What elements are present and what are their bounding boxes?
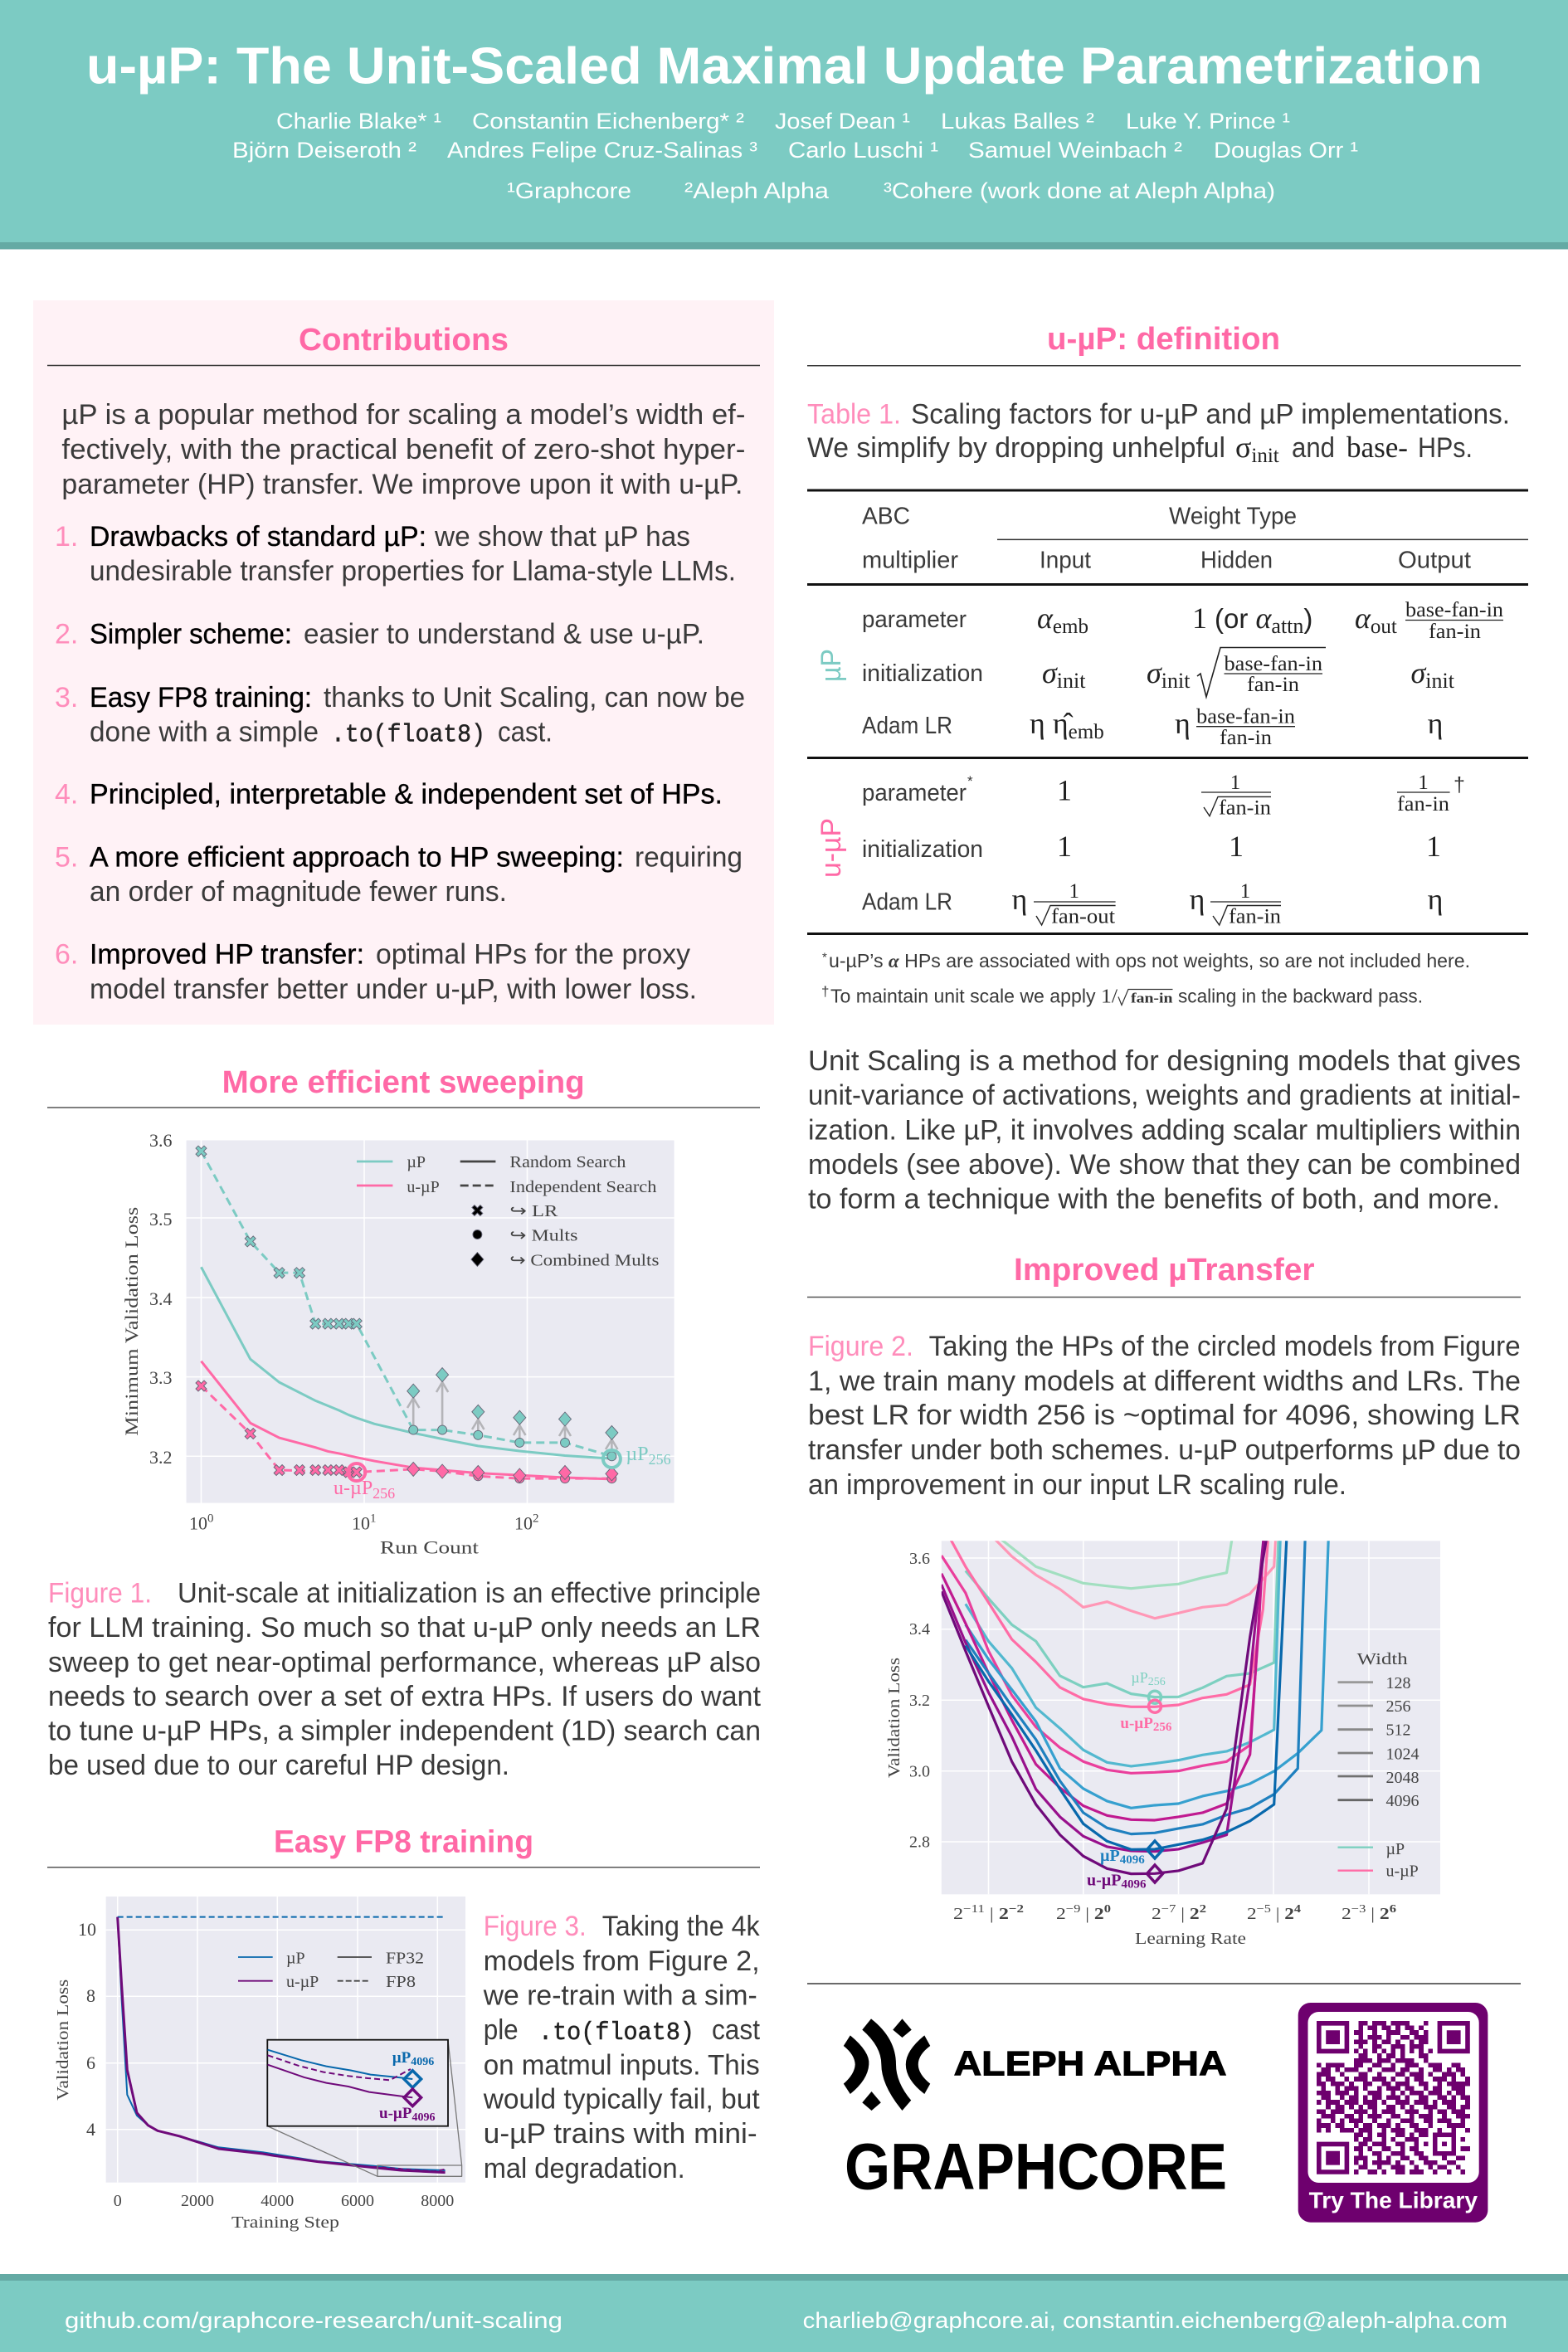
validation curves by width [942,1537,1328,1874]
row label: µP: µP [816,649,847,682]
axis title: x: Training Step [231,2213,339,2232]
figure 2 caption: Taking the HPs of the circled models from Figure [929,1331,1521,1362]
µP rows: base-fan-in [1405,599,1504,621]
µP rows: initialization [862,660,983,687]
table caption: and [1292,432,1335,464]
x axis ticks: 6 [1390,1903,1396,1916]
label: µP4096: 4096 [1120,1853,1145,1867]
y axis ticks: 3.3 [149,1367,173,1388]
figure 3 caption: we re-train with a sim- [483,1980,757,2012]
chart: figure 2 learning rate vs validation loss [885,1537,1440,1948]
qr caption: Try The Library [1309,2188,1478,2213]
intro paragraph: fectively, with the practical benefit of zero-shot hyper- [61,434,745,465]
legend: µP [407,1153,426,1171]
figure 1 caption: needs to search over a set of extra HPs. If users do want [48,1681,762,1712]
authors: Björn Deiseroth ² [232,138,416,163]
unit scaling paragraph: ization. Like µP, it involves adding scalar multipliers within [808,1115,1521,1147]
µP rows: ) [1303,603,1312,634]
list item 6 [55,939,697,1006]
u-µP rows: † [1454,773,1465,796]
µP rows: η [1428,707,1443,740]
x axis ticks [953,1903,1396,1923]
µP rows: Adam LR [862,713,952,739]
x axis ticks: 2 [1190,1905,1200,1923]
authors: Samuel Weinbach ² [968,138,1182,163]
unit scaling paragraph: Unit Scaling is a method for designing models that gives [808,1045,1521,1077]
x axis ticks: 2 [1342,1905,1350,1923]
y axis ticks: 3.0 [909,1763,930,1781]
list item 3: done with a simple [90,717,319,748]
list item 3: cast. [498,717,553,748]
affiliations: ¹Graphcore [507,178,631,203]
table caption: We simplify by dropping unhelpful [807,432,1225,464]
u-µP rows: 1 [1057,774,1072,807]
x axis ticks: −2 [1009,1903,1024,1916]
heading: easy fp8 training: Easy FP8 training [274,1825,533,1860]
u-µP rows: 1 [1240,880,1250,903]
table footnotes: scaling in the backward pass. [1178,986,1423,1007]
table caption: HPs. [1418,432,1473,464]
µP rows [862,599,1504,749]
y axis ticks: 2.8 [909,1833,930,1852]
legend: ↪ Mults [509,1227,578,1245]
label: u-µP256: 256 [373,1485,395,1502]
authors: Carlo Luschi ¹ [788,138,938,163]
inset zoom panel [267,2040,448,2126]
x axis ticks: 1 [370,1512,377,1526]
legend: 128 [1385,1674,1410,1692]
table footnotes: * [822,951,827,964]
x axis ticks: −9 [1066,1903,1080,1916]
u-µP rows: 1 [1229,830,1244,863]
x axis ticks: 2 [953,1905,962,1923]
u-µP rows: fan-in [1219,796,1272,820]
legend: 512 [1385,1721,1410,1740]
y axis ticks: 3.5 [149,1209,173,1230]
x axis ticks: 2 [1380,1905,1390,1923]
column headers: Output [1398,548,1471,574]
figure 3 caption: mal degradation. [484,2153,685,2184]
legend: 1024 [1385,1746,1419,1764]
table footnotes: † [821,984,829,999]
list item 5: A more efficient approach to HP sweeping: [90,841,624,873]
legend: Independent Search [509,1178,656,1196]
µP rows: init [1161,669,1191,693]
figure 1 caption: for LLM training. So much so that u-µP only needs an LR [48,1612,761,1643]
list item 2: 2. [55,619,78,650]
figure 3 caption: models from Figure 2, [484,1945,760,1977]
x axis ticks: 2 [1056,1905,1064,1923]
label: µP256: µP [1131,1669,1148,1686]
µP rows: parameter [862,606,967,633]
label: µP256: µP [626,1444,649,1465]
legend [357,1153,660,1269]
axis title: y: Minimum Validation Loss [121,1207,142,1436]
x axis ticks: 10 [352,1513,370,1534]
list item 5: 5. [55,841,78,873]
µP rows: base-fan-in [1196,705,1296,728]
u-µP rows: * [967,773,973,789]
figure 3 caption: on matmul inputs. This [484,2050,760,2082]
unit scaling paragraph: unit-variance of activations, weights and gradients at initial- [808,1080,1521,1112]
x axis ticks: | [985,1905,999,1923]
figure 3 caption: ple [484,2014,519,2046]
footer: repository link: github.com/graphcore-research/unit-scaling [65,2308,562,2333]
label: u-µP256: u-µP [1120,1715,1153,1732]
x axis ticks [189,1512,539,1534]
u-µP rows: Adam LR [862,889,952,916]
u-µP rows: 1 [1418,772,1429,794]
axis title: x: Learning Rate [1135,1930,1246,1948]
x axis ticks: 0 [114,2192,122,2210]
label: u-µP256: u-µP [334,1478,373,1499]
x axis ticks: 2 [1152,1905,1160,1923]
legend [1337,1650,1419,1881]
authors: Luke Y. Prince ¹ [1126,109,1290,134]
label: µP256: 256 [1148,1676,1166,1688]
panel: contributions [33,300,774,1025]
list item 3 [55,682,745,750]
list item 4: Principled, interpretable & independent set of HPs. [90,778,723,810]
label: µP256: 256 [649,1451,671,1468]
y axis ticks: 4 [86,2119,95,2140]
u-µP rows: parameter [862,780,967,806]
column headers: ABC [862,503,910,529]
x axis ticks: −7 [1161,1903,1176,1916]
unit scaling paragraph [808,1045,1521,1215]
µP rows: 1 (or α [1192,601,1271,635]
x axis ticks: 2 [999,1905,1009,1923]
list item 5: requiring [635,841,743,873]
pink markers [196,1381,618,1483]
y axis ticks: 3.4 [909,1620,930,1639]
column headers: multiplier [862,548,958,574]
legend: u-µP [407,1178,440,1196]
figure 2 caption: 1, we train many models at different widths and LRs. The [808,1366,1521,1397]
qr code card [1298,2003,1488,2223]
table caption: Table 1. [807,398,901,430]
x axis ticks: 2000 [181,2192,214,2210]
u-µP rows: 1 [1230,772,1240,794]
x axis ticks [114,2192,454,2210]
authors: Douglas Orr ¹ [1214,138,1358,163]
x axis ticks: | [1366,1905,1380,1923]
heading: contributions: Contributions [299,323,509,358]
µP rows: out [1371,616,1397,638]
figure 2 caption: Figure 2. [808,1331,913,1362]
heading: u-µP definition: u-µP: definition [1047,322,1280,357]
u-µP rows: initialization [862,836,983,863]
zoom connectors [267,2040,462,2176]
x axis ticks: 6000 [341,2192,374,2210]
y axis ticks: 10 [78,1919,96,1940]
µP rows: η η̂ [1030,707,1069,740]
table caption: base- [1346,431,1408,464]
list item 2 [55,619,704,650]
list item 5 [55,841,743,908]
y axis ticks: 3.2 [909,1692,930,1710]
authors [232,109,1358,163]
x axis ticks: | [1176,1905,1190,1923]
authors: Lukas Balles ² [941,109,1094,134]
heading: more efficient sweeping: More efficient sweeping [222,1065,585,1100]
legend: ↪ Combined Mults [509,1251,660,1269]
list item 5: an order of magnitude fewer runs. [90,876,507,908]
figure 3 caption: cast [712,2014,761,2046]
µP rows: init [1057,669,1086,693]
figure 3 caption: Taking the 4k [602,1911,761,1942]
x axis ticks: 2 [1247,1905,1255,1923]
table footnotes: u-µP’s α HPs are associated with ops not weights, so are not included here. [829,950,1470,971]
label: u-µP4096: 4096 [1122,1878,1147,1892]
affiliations: ³Cohere (work done at Aleph Alpha) [884,178,1275,203]
chart: figure 1 run count vs minimum validation loss [121,1130,674,1558]
figure 3 caption: Figure 3. [484,1911,587,1942]
circled models [603,1450,621,1468]
list item 6: model transfer better under u-µP, with lower loss. [90,974,697,1006]
x axis ticks: 2 [1094,1905,1104,1923]
list item 6: optimal HPs for the proxy [376,939,690,971]
x axis ticks: 0 [1104,1903,1111,1916]
label: u-µP4096: 4096 [411,2111,435,2124]
list item 6: Improved HP transfer: [90,939,364,971]
column headers [862,503,1471,574]
µP rows: α [1037,601,1054,635]
µP rows: base-fan-in [1225,653,1323,675]
µP rows: fan-in [1220,727,1273,749]
u-µP rows: fan-out [1051,906,1115,928]
y axis ticks [149,1130,173,1468]
x axis ticks: 2 [533,1512,539,1526]
figure 1 caption: to tune u-µP HPs, a simpler independent (1D) search can [48,1716,761,1747]
y axis ticks: 3.4 [149,1288,173,1309]
legend: u-µP [286,1973,319,1991]
list item 3: Easy FP8 training: [90,682,312,713]
unit scaling paragraph: to form a technique with the benefits of both, and more. [808,1183,1500,1215]
table footnotes: fan-in [1131,991,1173,1006]
x axis ticks: 0 [207,1512,214,1526]
list item 3: 3. [55,682,78,713]
y axis ticks: 6 [86,2053,95,2073]
x axis ticks: | [1080,1905,1094,1923]
table footnotes: To maintain unit scale we apply [830,986,1096,1007]
µP rows: init [1425,669,1455,693]
label: u-µP4096: u-µP [379,2105,411,2122]
table caption: init [1251,445,1279,467]
list item 1: we show that µP has [434,521,690,553]
authors: Josef Dean ¹ [775,109,910,134]
intro paragraph: parameter (HP) transfer. We improve upon it with u-µP. [61,469,743,500]
x axis ticks: 8000 [421,2192,454,2210]
figure 2 caption: transfer under both schemes. u-µP outperforms µP due to [808,1434,1521,1466]
affiliations: ²Aleph Alpha [684,178,830,203]
footer: contact emails: charlieb@graphcore.ai, constantin.eichenberg@aleph-alpha.com [803,2308,1507,2333]
x axis ticks: 10 [514,1513,533,1534]
µP rows: emb [1053,616,1088,638]
list item 3: thanks to Unit Scaling, can now be [324,682,745,713]
qr code pattern [1317,2021,1470,2174]
µP rows: emb [1069,721,1104,743]
unit scaling paragraph: models (see above). We show that they can be combined [808,1149,1521,1181]
table caption [807,398,1510,467]
x axis ticks: 2 [1200,1903,1206,1916]
legend: µP [286,1950,305,1968]
heading: improved µTransfer: Improved µTransfer [1014,1253,1315,1288]
logo: aleph alpha: ALEPH ALPHA [954,2044,1227,2083]
list item 2: easier to understand & use u-µP. [304,619,704,650]
column headers: Input [1040,548,1091,574]
logo: graphcore: GRAPHCORE [845,2129,1227,2203]
y axis ticks: 8 [86,1985,95,2006]
x axis ticks: 10 [189,1513,207,1534]
figure 3 caption [483,1911,761,2184]
u-µP rows: fan-in [1229,906,1282,928]
figure 1 caption: be used due to our careful HP design. [48,1750,509,1781]
list item 2: Simpler scheme: [90,619,292,650]
legend: u-µP [1385,1863,1419,1881]
legend: FP8 [386,1973,416,1991]
list item 1: Drawbacks of standard µP: [90,521,426,553]
arrows from multipliers to combined multipliers [407,1381,617,1456]
label: u-µP4096: u-µP [1087,1872,1122,1890]
table footnotes [821,950,1470,1007]
authors: Charlie Blake* ¹ [276,109,441,134]
figure 2 caption: an improvement in our input LR scaling rule. [808,1469,1346,1501]
list item 1 [55,521,736,587]
legend: FP32 [386,1950,424,1968]
x axis ticks: 4000 [261,2192,294,2210]
legend [238,1950,424,1991]
axis title: y: Validation Loss [54,1979,72,2101]
x axis ticks: −5 [1257,1903,1271,1916]
legend: ↪ LR [509,1202,558,1220]
list item 1: 1. [55,521,78,553]
label: µP4096: µP [392,2049,411,2067]
icon: aleph alpha mark [844,2018,930,2111]
affiliations [507,178,1275,203]
axis title: x: Run Count [380,1537,479,1558]
label: µP4096: 4096 [411,2056,434,2068]
figure 1 caption: Unit-scale at initialization is an effective principle [178,1578,761,1609]
figure 1 caption: Figure 1. [48,1578,152,1609]
teal markers [196,1146,618,1461]
u-µP rows: η [1428,883,1443,916]
title: u-µP: The Unit-Scaled Maximal Update Parametrization [86,38,1483,95]
x axis ticks: | [1271,1905,1284,1923]
figure 3 caption: u-µP trains with mini- [484,2118,757,2150]
legend: Random Search [509,1153,626,1171]
u-µP rows: 1 [1426,830,1441,863]
y axis ticks: 3.6 [149,1130,173,1151]
u-µP rows: 1 [1069,880,1079,903]
legend: 4096 [1385,1792,1419,1810]
x axis ticks: −3 [1351,1903,1366,1916]
x axis ticks: −11 [963,1903,985,1916]
µP rows: α [1355,601,1371,635]
y axis ticks [78,1919,96,2140]
axis title: y: Validation Loss [885,1658,903,1778]
intro paragraph [61,399,745,500]
logo: aleph alpha [844,2018,1227,2111]
intro paragraph: µP is a popular method for scaling a model’s width ef- [61,399,745,431]
µP rows: fan-in [1429,621,1482,643]
authors: Constantin Eichenberg* ² [472,109,744,134]
u-µP rows: η [1190,883,1205,916]
u-µP rows: η [1012,883,1027,916]
header [0,0,1568,249]
x axis ticks: 4 [1294,1903,1301,1916]
µP rows: σ [1147,656,1162,689]
figure 1 caption: sweep to get near-optimal performance, whereas µP also [48,1647,761,1678]
legend: 2048 [1385,1769,1419,1787]
random search lines [201,1152,611,1479]
table caption: Scaling factors for u-µP and µP implementations. [911,398,1510,430]
u-µP rows [862,772,1465,928]
figure 3 caption: would typically fail, but [483,2084,760,2116]
column headers: Weight Type [1169,503,1297,529]
list item 4: 4. [55,778,78,810]
figure 2 caption: best LR for width 256 is ~optimal for 4096, showing LR [808,1400,1521,1431]
µP rows: σ [1410,656,1427,689]
figure 1 caption [48,1578,762,1781]
table footnotes: 1/ [1101,986,1118,1007]
figure 2 caption [808,1331,1521,1501]
y axis ticks [909,1550,930,1852]
table: scaling factors [807,490,1528,934]
chart: figure 3 training step vs validation loss [54,1897,465,2232]
list item 3: .to(float8) [331,720,485,750]
µP rows: σ [1042,656,1058,689]
label: µP4096: µP [1100,1847,1120,1865]
table caption: σ [1235,431,1251,464]
µP rows: fan-in [1247,674,1300,696]
x axis ticks: 2 [1284,1905,1294,1923]
authors: Andres Felipe Cruz-Salinas ³ [447,138,757,163]
u-µP rows: fan-in [1397,793,1450,816]
µP rows: attn [1271,614,1303,638]
label: u-µP256: 256 [1153,1721,1172,1734]
footer [0,2274,1568,2352]
list item 1: undesirable transfer properties for Llama-style LLMs. [90,556,736,587]
legend: µP [1385,1840,1405,1858]
figure 3 caption: .to(float8) [538,2018,694,2048]
y axis ticks: 3.2 [149,1447,173,1468]
u-µP rows: 1 [1057,830,1072,863]
fp8 and fp32 curves [118,1917,462,2176]
row label: u-µP: u-µP [816,818,847,878]
legend: 256 [1385,1697,1410,1716]
legend: Width [1357,1650,1408,1668]
y axis ticks: 3.6 [909,1550,930,1568]
markers: circled and diamond models [1147,1691,1163,1882]
column headers: Hidden [1200,548,1273,574]
µP rows: η [1175,707,1191,740]
list item 6: 6. [55,939,78,971]
